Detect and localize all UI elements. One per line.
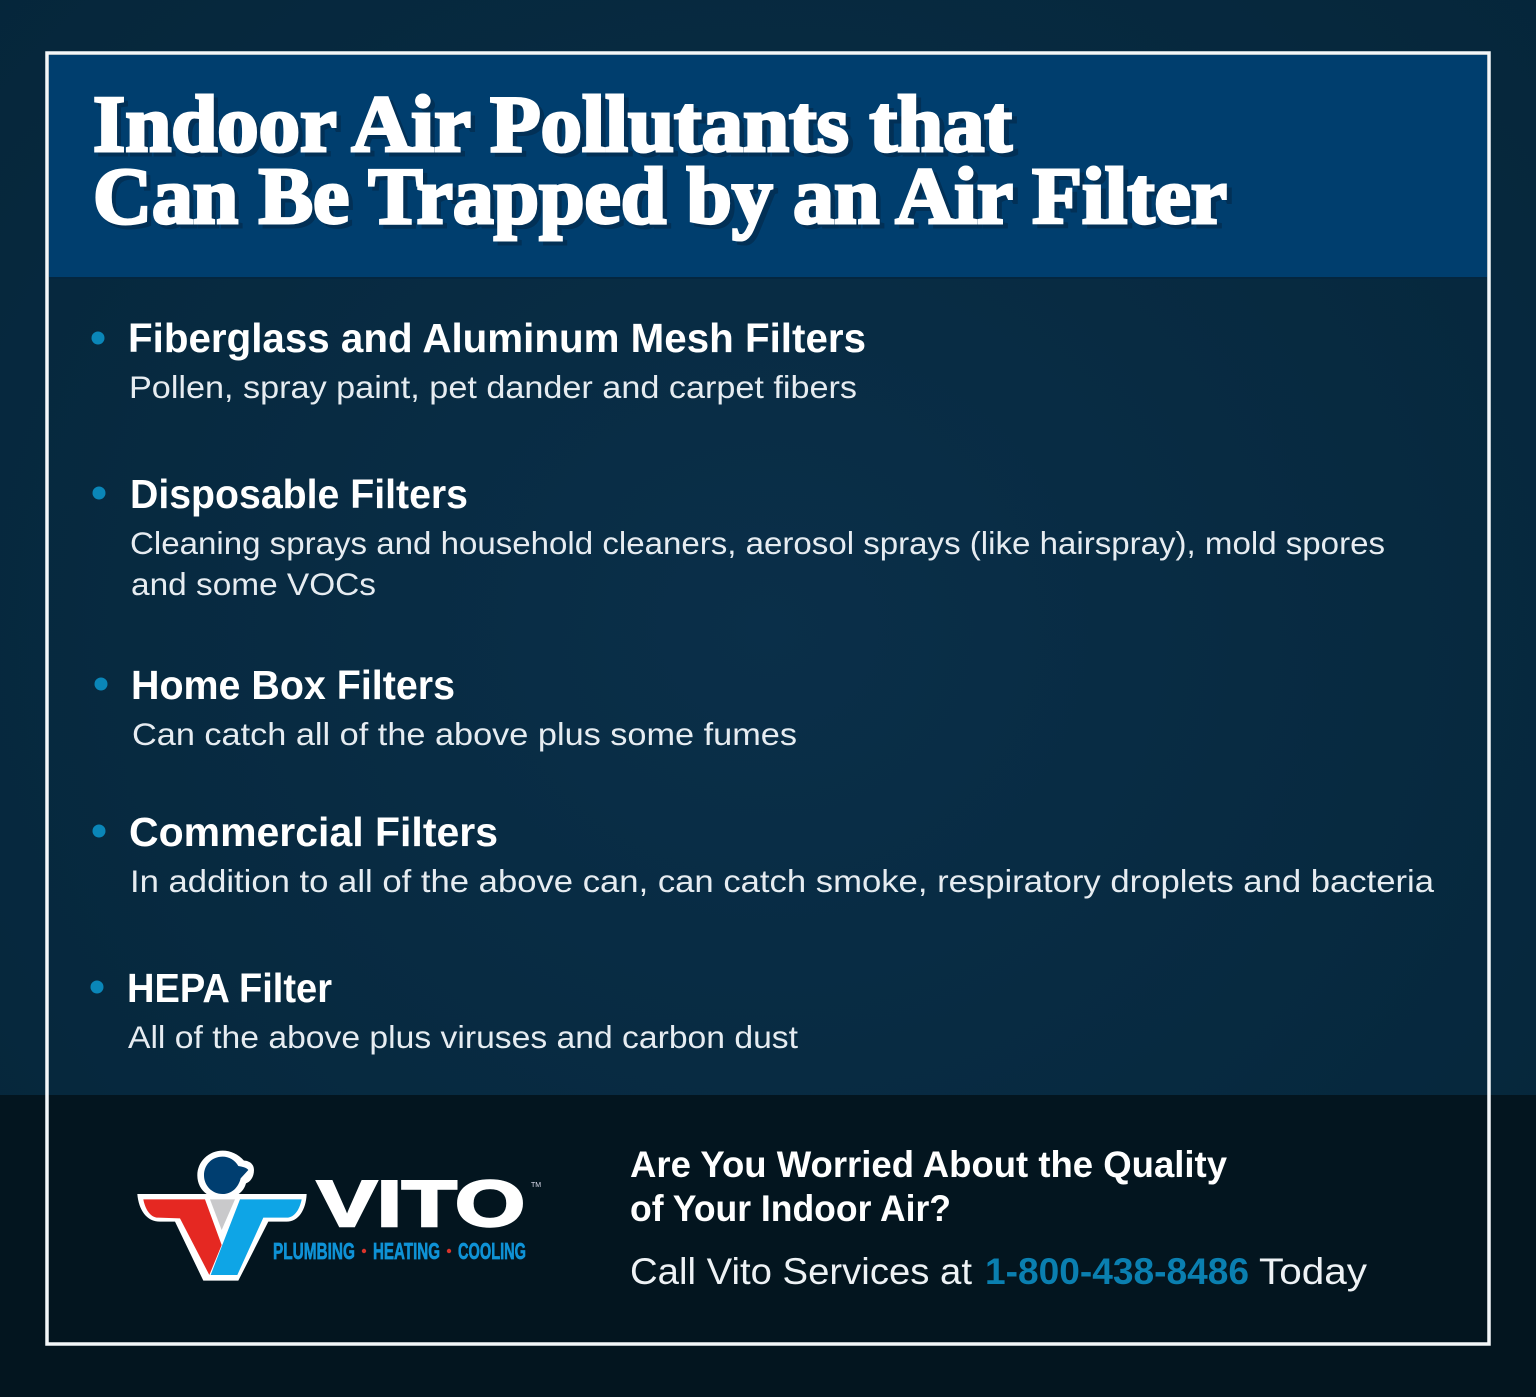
list item: disposable filters: Cleaning sprays and household cleaners, aerosol sprays (like hairspray), mold spores — [130, 525, 1385, 561]
title: Indoor Air Pollutants that — [97, 85, 1017, 173]
title: Can Be Trapped by an Air Filter — [93, 153, 1227, 241]
footer call to action — [630, 1144, 1368, 1292]
list item: commercial filters: Commercial Filters — [129, 809, 498, 855]
tagline — [273, 1238, 526, 1264]
list item: home box filters: Can catch all of the above plus some fumes — [132, 716, 797, 752]
title: Indoor Air Pollutants that — [93, 81, 1012, 169]
logo: Vito — [137, 1151, 541, 1281]
list item: HEPA filter — [90, 965, 798, 1055]
list item: disposable filters: Disposable Filters — [130, 471, 468, 517]
list item: home box filters — [94, 662, 797, 752]
panel: footer — [0, 1095, 1536, 1397]
phone number: 1-800-438-8486 — [985, 1251, 1249, 1292]
list item: HEPA filter: All of the above plus viruses and carbon dust — [128, 1019, 798, 1055]
list item: commercial filters: In addition to all of the above can, can catch smoke, respiratory droplets and bacteria — [130, 863, 1435, 899]
list item: fiberglass and aluminum mesh filters: Fiberglass and Aluminum Mesh Filters — [128, 315, 866, 361]
title — [93, 81, 1232, 245]
list item: disposable filters: and some VOCs — [131, 566, 376, 602]
trademark: TM — [531, 1182, 541, 1189]
list item: HEPA filter: HEPA Filter — [127, 965, 332, 1011]
wordmark: VITO — [317, 1167, 525, 1240]
footer call to action: Today — [1259, 1251, 1368, 1292]
title: Can Be Trapped by an Air Filter — [97, 157, 1232, 245]
list item: disposable filters — [92, 471, 1385, 602]
panel: title banner — [49, 55, 1487, 279]
footer call to action: Call Vito Services at — [630, 1251, 973, 1292]
footer call to action: of Your Indoor Air? — [630, 1188, 951, 1229]
list item: fiberglass and aluminum mesh filters: Pollen, spray paint, pet dander and carpet fibers — [129, 369, 857, 405]
footer call to action: Are You Worried About the Quality — [630, 1144, 1227, 1185]
list item: home box filters: Home Box Filters — [131, 662, 455, 708]
icon: Vito figure — [137, 1151, 307, 1281]
tagline: HEATING — [373, 1238, 440, 1264]
list item: commercial filters — [92, 809, 1435, 899]
tagline: PLUMBING — [273, 1238, 355, 1264]
tagline: COOLING — [458, 1238, 526, 1264]
list item: fiberglass and aluminum mesh filters — [92, 315, 866, 405]
